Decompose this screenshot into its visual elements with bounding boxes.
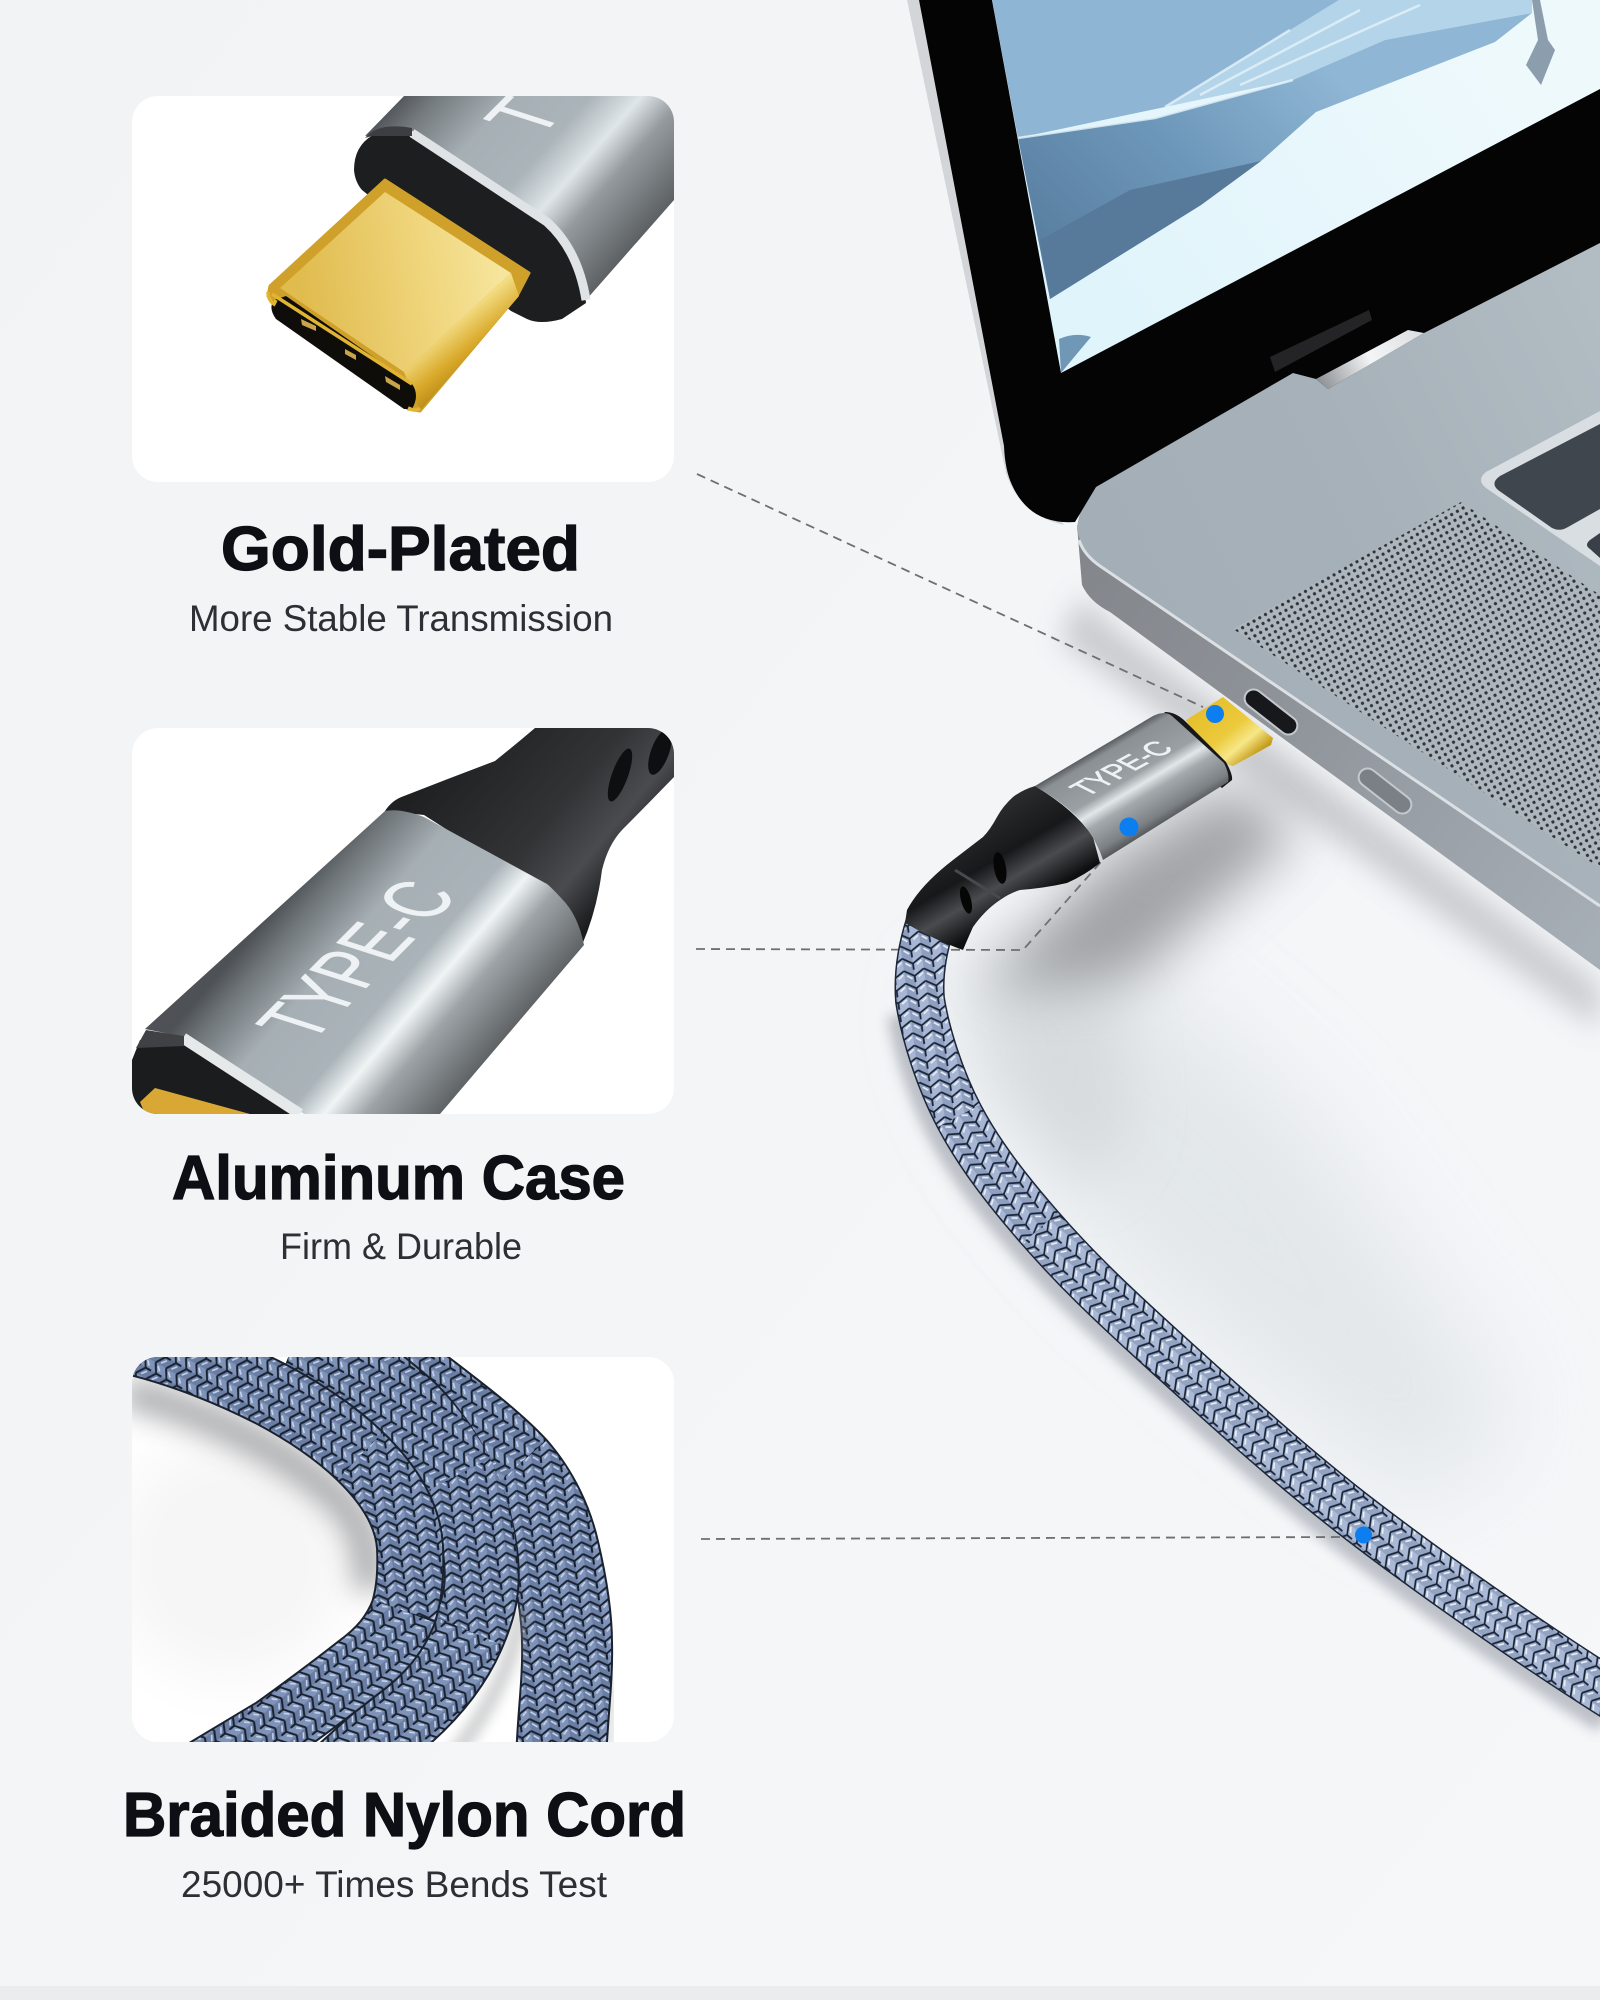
TYPE-C lettering: TYPE-C xyxy=(237,871,477,1049)
gold side xyxy=(404,273,519,411)
keyboard key xyxy=(1494,424,1600,530)
leader line: gold tip xyxy=(697,474,1203,707)
TYPE-C lettering: TYPE-C xyxy=(1062,737,1181,800)
screen splash xyxy=(1526,0,1555,85)
hinge dark segment xyxy=(1270,310,1372,372)
black collar xyxy=(354,135,586,322)
screen blob xyxy=(1059,335,1091,373)
laptop base top surface xyxy=(1077,200,1600,906)
dark chrome notch xyxy=(365,126,412,138)
callout dot: aluminum case xyxy=(1120,818,1138,836)
heading: Aluminum Case: Aluminum Case xyxy=(172,1144,625,1213)
lettering on shell: T xyxy=(465,88,583,144)
panel: braided cord photo xyxy=(132,1357,674,1742)
chrome ring xyxy=(412,133,586,300)
aluminum shell xyxy=(365,96,674,300)
cord shadow xyxy=(125,1392,369,1590)
keyboard key frame xyxy=(1481,411,1600,566)
gold shell top xyxy=(268,180,529,411)
shadow right of outer cord xyxy=(606,1680,612,1760)
subheading: 25000+ Times Bends Test: 25000+ Times Bends Test xyxy=(181,1864,608,1905)
inner whitespace tint xyxy=(148,1478,312,1642)
chrome ring xyxy=(183,1038,300,1114)
black collar xyxy=(132,1040,300,1114)
speaker grille xyxy=(1233,502,1600,868)
bottom strip xyxy=(0,1986,1600,2000)
edge highlight xyxy=(1079,540,1600,906)
callout dot: gold tip xyxy=(1206,705,1224,723)
panel: gold-plated connector photo xyxy=(132,88,674,482)
heading: Gold-Plated: Gold-Plated xyxy=(221,515,580,584)
subheading: More Stable Transmission: More Stable Transmission xyxy=(189,598,613,639)
outer cord xyxy=(370,1340,567,1760)
leader line: braided cord xyxy=(701,1537,1351,1539)
strain relief xyxy=(905,786,1100,950)
laptop screen xyxy=(992,0,1600,373)
callout dot: braided cord xyxy=(1355,1526,1372,1544)
black lid bezel xyxy=(919,0,1600,522)
inner cord xyxy=(100,1335,410,1775)
USB-C port one xyxy=(1241,686,1301,738)
aluminum body xyxy=(1035,713,1228,860)
laptop xyxy=(907,0,1600,970)
dark chrome notch xyxy=(136,1030,184,1048)
middle cord xyxy=(298,1333,482,1775)
heading: Braided Nylon Cord: Braided Nylon Cord xyxy=(123,1781,686,1850)
rubber strain relief xyxy=(385,728,674,945)
screen wave light band xyxy=(1165,0,1532,107)
USB-C port two xyxy=(1355,765,1415,817)
screen wave lower xyxy=(1018,13,1532,299)
connector opening xyxy=(271,296,416,409)
soft shadows under laptop, connector and cable xyxy=(909,595,1600,1713)
main USB-C connector xyxy=(905,697,1273,950)
relief slots xyxy=(608,732,672,802)
braided main cable xyxy=(919,925,1600,1700)
relief grooves xyxy=(955,851,1009,915)
gold lit face xyxy=(280,192,511,372)
aluminum body xyxy=(145,810,584,1114)
screen wave upper xyxy=(992,0,1339,138)
panel: aluminum case photo xyxy=(132,726,677,1114)
leader line: aluminum case xyxy=(696,837,1123,950)
laptop base side xyxy=(1077,525,1600,970)
gold tip xyxy=(140,1088,250,1114)
gold plug xyxy=(1186,697,1273,766)
trim ring xyxy=(1150,712,1232,788)
second key xyxy=(1587,533,1600,558)
hinge silver strip xyxy=(1316,330,1424,389)
subheading: Firm & Durable: Firm & Durable xyxy=(280,1226,522,1267)
shadow gap between cords xyxy=(450,1610,520,1760)
gold rim xyxy=(268,292,420,410)
screen wave dark fold xyxy=(1040,161,1261,299)
silver lid edge xyxy=(907,0,1064,525)
screen wave highlights xyxy=(1018,5,1420,138)
contact pins xyxy=(301,319,400,390)
